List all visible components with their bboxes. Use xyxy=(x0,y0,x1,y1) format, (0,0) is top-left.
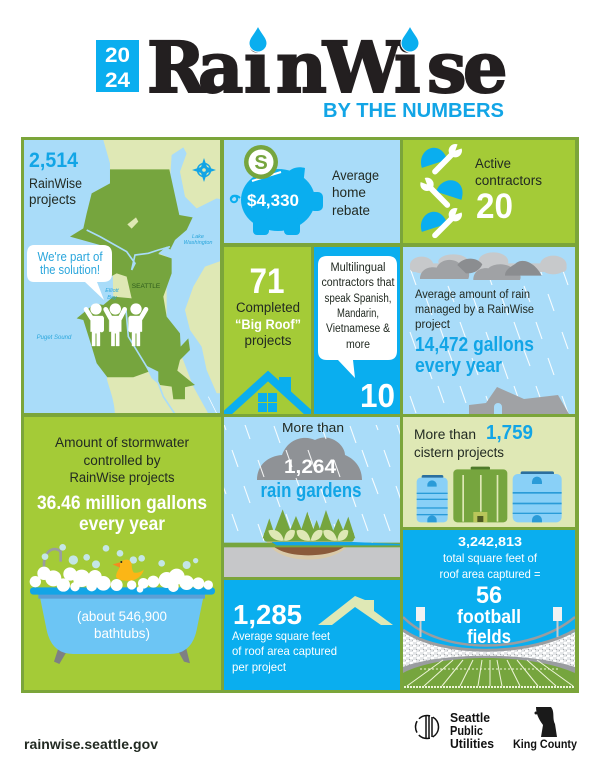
label: completed big roof projects xyxy=(235,300,301,348)
label: Lake Washington: Washington xyxy=(184,240,212,246)
icon: roof xyxy=(318,596,393,625)
logo: Seattle Public Utilities: Seattle xyxy=(450,711,490,725)
grid frame xyxy=(21,137,579,693)
rain streaks xyxy=(224,425,400,543)
label: total square feet: total square feet of xyxy=(443,551,538,565)
label: about 546,900 bathtubs: bathtubs) xyxy=(94,626,150,641)
stat: 20 contractors: 20 xyxy=(476,187,513,226)
speech bubble: We're part of xyxy=(38,250,103,264)
label: more than: More than xyxy=(282,420,344,435)
stat: 2,514 projects: projects xyxy=(29,192,76,207)
icon: piggy bank xyxy=(231,167,323,235)
year badge: 24 xyxy=(105,69,130,92)
panel: multilingual contractors xyxy=(314,247,400,414)
logo: Seattle Public Utilities xyxy=(416,711,494,751)
label: about 546,900 bathtubs: (about 546,900 xyxy=(77,609,167,624)
stat: 14,472 gallons: 14,472 gallons xyxy=(415,334,534,356)
speech bubble: the solution! xyxy=(40,263,100,277)
icon: dollar coin xyxy=(244,145,278,179)
label: Seattle: SEATTLE xyxy=(132,283,161,290)
panel: big roof projects xyxy=(224,247,312,416)
stat: 56 football fields: 56 xyxy=(476,582,502,609)
speech bubble: more xyxy=(346,339,370,351)
label: cistern projects: cistern projects xyxy=(414,445,504,460)
label: average home rebate: rebate xyxy=(332,203,370,218)
stat: 2,514 projects xyxy=(29,149,82,207)
stat: 56 football fields: fields xyxy=(467,627,511,648)
logo: King County: King County xyxy=(513,737,577,751)
speech bubble: Vietnamese & xyxy=(326,323,390,335)
subtitle: BY THE NUMBERS xyxy=(323,100,504,122)
label: average home rebate: home xyxy=(332,185,366,200)
label: average rain: managed by a RainWise xyxy=(415,304,534,316)
logo: King County xyxy=(513,707,577,751)
label: average square feet: Average square feet xyxy=(232,629,331,643)
label: Puget Sound: Puget Sound xyxy=(37,335,72,341)
icon: house xyxy=(224,376,312,416)
label: Elliott Bay: Bay xyxy=(107,295,118,301)
label: completed big roof projects: Completed xyxy=(236,300,300,315)
label: active contractors: contractors xyxy=(475,173,542,188)
stat: 56 football fields xyxy=(457,582,521,648)
stat: 56 football fields: football xyxy=(457,607,521,628)
stat: 1,285: 1,285 xyxy=(233,599,302,630)
panel: cistern projects xyxy=(403,417,575,527)
label: amount of stormwater xyxy=(55,435,190,485)
panel: rain gardens xyxy=(224,417,401,577)
label: active contractors xyxy=(475,156,542,188)
label: average home rebate xyxy=(332,168,379,218)
logo: Seattle Public Utilities: Public xyxy=(450,724,483,738)
label: total square feet xyxy=(440,551,540,581)
icon: rain drop right xyxy=(401,26,419,52)
label: more than: More than xyxy=(414,427,476,442)
stat: 71: 71 xyxy=(250,262,284,301)
panel: football fields xyxy=(403,530,575,690)
speech bubble xyxy=(318,256,397,378)
panel: stormwater controlled xyxy=(24,417,221,690)
speech bubble: contractors that xyxy=(322,277,395,289)
label: amount of stormwater: Amount of stormwater xyxy=(55,435,190,450)
stat: 2,514 projects: 2,514 xyxy=(29,149,78,172)
speech bubble: Multilingual xyxy=(330,262,386,274)
stat: 36.46 million gallons: every year xyxy=(79,514,166,535)
icon: three cisterns xyxy=(417,467,562,522)
speech bubble: speak Spanish, xyxy=(324,293,392,305)
stat: 36.46 million gallons: 36.46 million gallons xyxy=(37,493,207,514)
panel: rain managed per project xyxy=(403,247,575,414)
panel: average roof area xyxy=(224,580,400,690)
label: rain gardens: rain gardens xyxy=(260,480,362,502)
label: Lake Washington: Lake xyxy=(192,234,204,240)
panel: map of RainWise projects xyxy=(24,140,223,417)
label: Elliott Bay: Elliott xyxy=(105,288,119,294)
label: average rain xyxy=(415,289,534,331)
label: amount of stormwater: RainWise projects xyxy=(70,470,175,485)
stat: 2,514 projects: RainWise xyxy=(29,176,82,191)
stat: 14,472 gallons: every year xyxy=(415,355,502,377)
label: about 546,900 bathtubs xyxy=(77,609,167,641)
label: average square feet xyxy=(232,629,337,674)
icon: rain drop left xyxy=(249,26,267,52)
stat: 3,242,813: 3,242,813 xyxy=(458,534,522,549)
label: average rain: Average amount of rain xyxy=(415,289,530,301)
map of Seattle xyxy=(70,140,223,417)
icon: three people cheering xyxy=(86,303,146,346)
speech bubble xyxy=(27,245,112,300)
label: total square feet: roof area captured = xyxy=(440,567,540,581)
stat: 14,472 gallons xyxy=(415,334,534,377)
icon: football stadium xyxy=(403,607,575,690)
RainWise wordmark: RainWise xyxy=(147,26,508,109)
label: completed big roof projects: “Big Roof” xyxy=(235,317,301,332)
stat: 10: 10 xyxy=(360,377,395,414)
stat: 1,264: 1,264 xyxy=(284,457,336,478)
label: average square feet: per project xyxy=(232,660,287,674)
label: average square feet: of roof area captured xyxy=(232,644,337,658)
icon: rain cloud xyxy=(257,438,362,480)
label: active contractors: Active xyxy=(475,156,511,171)
stat: rebate amount: $4,330 xyxy=(247,191,299,210)
year badge: 20 xyxy=(105,44,130,67)
stat: 36.46 million gallons xyxy=(37,493,207,535)
icon: hard hats and wrenches xyxy=(417,141,466,235)
website url: rainwise.seattle.gov xyxy=(24,736,158,752)
icon: grey house roof xyxy=(469,387,569,414)
icon: dollar coin: S xyxy=(254,152,268,174)
label: average rain: project xyxy=(415,319,451,331)
label: average home rebate: Average xyxy=(332,168,379,183)
title: RainWise 2024 by the numbers xyxy=(96,26,508,122)
icon: clouds xyxy=(410,252,567,280)
year badge xyxy=(96,40,139,92)
label: amount of stormwater: controlled by xyxy=(84,453,161,468)
speech bubble: Mandarin, xyxy=(337,308,379,320)
icon: bathtub with bubbles and duck xyxy=(30,544,215,664)
icon: compass xyxy=(192,158,216,182)
panel: average home rebate xyxy=(224,140,400,243)
icon: rain garden plants and basin xyxy=(224,509,401,560)
panel: active contractors xyxy=(403,140,575,243)
stat: 1,759: 1,759 xyxy=(486,422,533,444)
label: completed big roof projects: projects xyxy=(244,333,292,348)
logo: Seattle Public Utilities: Utilities xyxy=(450,737,494,751)
